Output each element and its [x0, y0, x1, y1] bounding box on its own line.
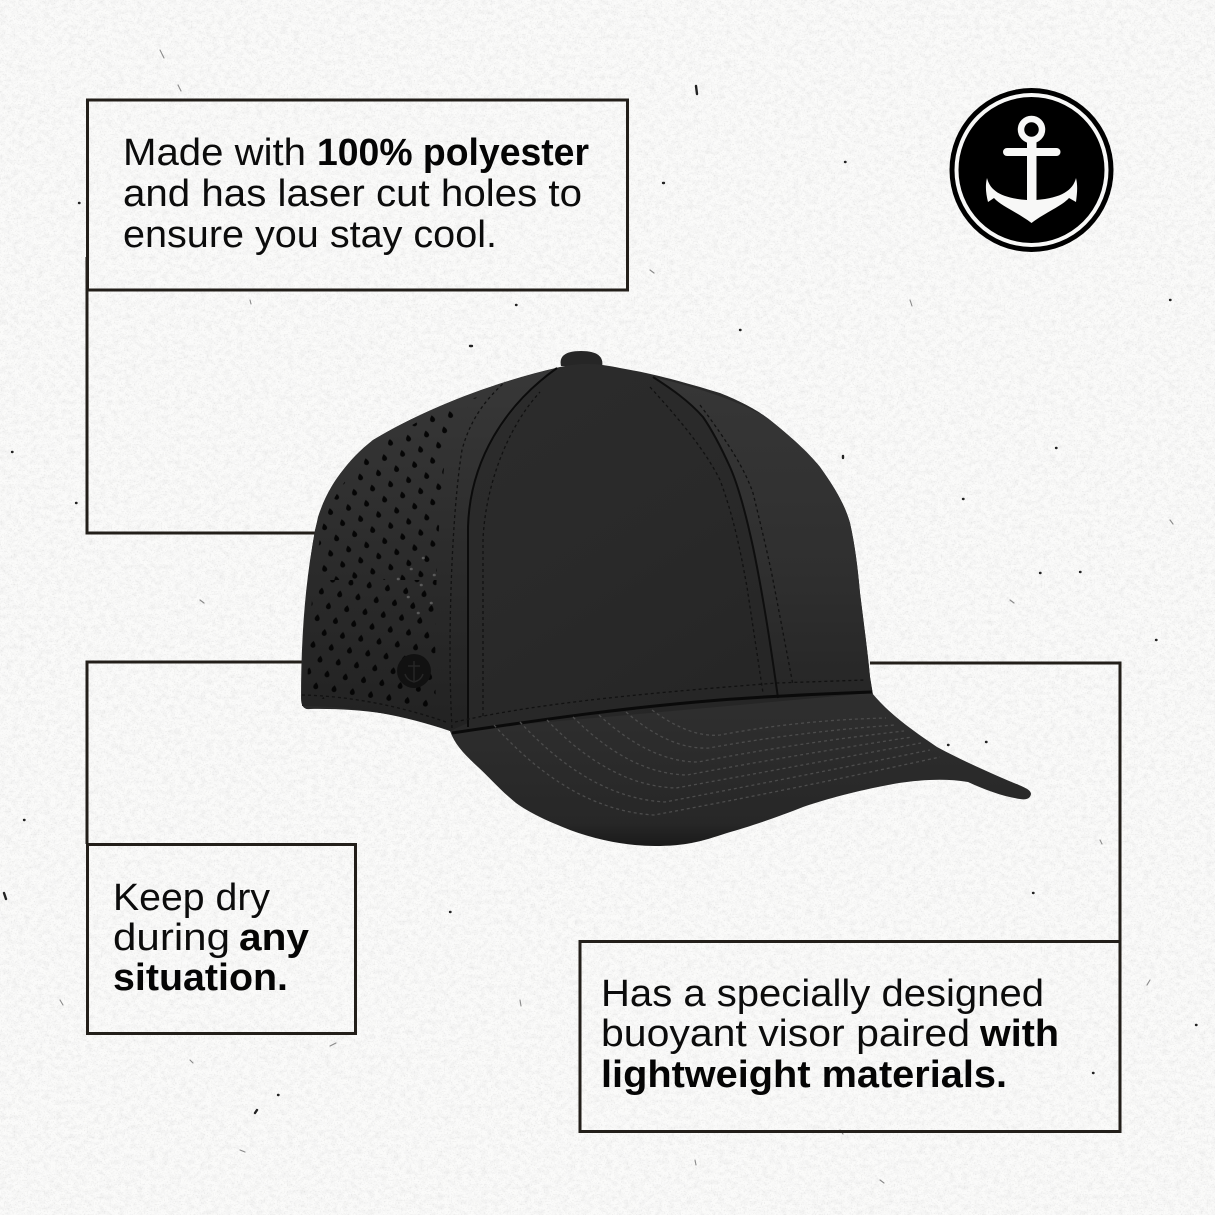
back panel with laser cut holes — [295, 368, 557, 731]
callout: buoyant visor — [580, 942, 1120, 1132]
callout: polyester: Made with — [123, 132, 306, 174]
seam stitching — [302, 382, 865, 728]
callout: buoyant visor: with — [979, 1013, 1059, 1055]
callout: keep dry: situation. — [113, 957, 288, 999]
callout: buoyant visor: Has a specially designed — [601, 973, 1044, 1015]
callout: buoyant visor: lightweight materials. — [601, 1054, 1007, 1096]
crown and visor joint — [452, 692, 872, 733]
callout: keep dry: during — [113, 917, 230, 959]
right crown panel — [653, 377, 873, 700]
callout: polyester — [88, 100, 628, 290]
panel seams — [468, 368, 557, 727]
callout: keep dry — [88, 844, 356, 1034]
callout: polyester: and has laser cut holes to — [123, 173, 582, 215]
callout connector: top box to crown — [87, 257, 318, 533]
callout: buoyant visor: buoyant visor paired — [601, 1013, 970, 1055]
crown silhouette — [301, 364, 873, 735]
callout: keep dry: Keep dry — [113, 877, 270, 919]
callout: keep dry: any — [239, 917, 309, 959]
visor — [450, 693, 1031, 846]
side anchor badge — [397, 654, 431, 688]
callout connector: right box to crown — [870, 663, 1120, 941]
callout connector: left box to crown — [87, 662, 302, 844]
cap button — [561, 351, 602, 367]
illustration: black cap — [295, 351, 1031, 846]
callout: polyester: 100% polyester — [317, 132, 589, 174]
icon: anchor logo — [950, 88, 1114, 252]
callout: polyester: ensure you stay cool. — [123, 214, 497, 256]
visor stitching — [494, 710, 940, 815]
